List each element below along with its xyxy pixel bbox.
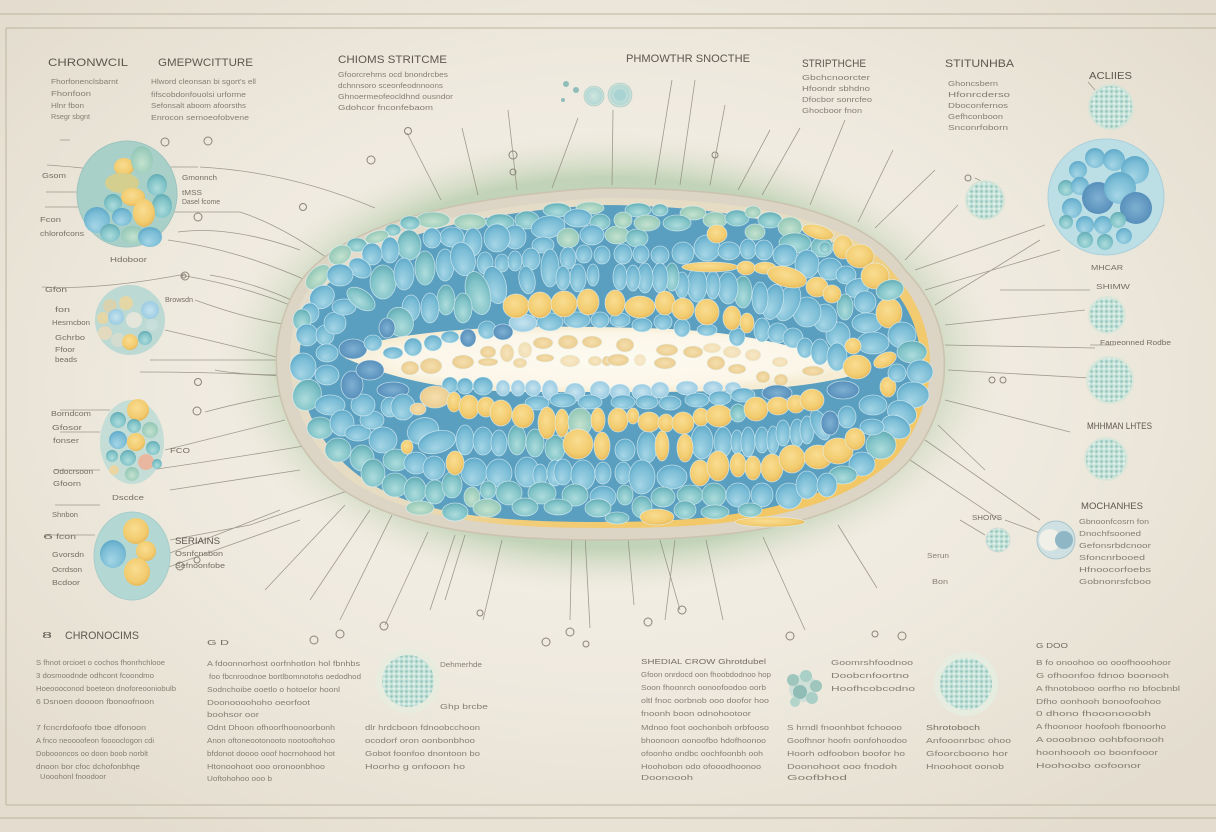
bottom panel 3: dlr hrdcboon fdnoobcchoon xyxy=(365,723,480,732)
cell B xyxy=(1087,357,1133,403)
second column top: Sefonsalt aboom afoorsths xyxy=(151,101,246,110)
left cluster 4 labels: Bcdoor xyxy=(52,578,81,587)
bottom panel 5: Goofbhod xyxy=(787,773,847,782)
bottom panel 5: Hoofhcobcodno xyxy=(831,684,915,693)
bottom panel 2: boohsor oor xyxy=(207,710,260,719)
bottom panel 2: Htonoohoot ooo oronoonbhoo xyxy=(207,762,325,771)
bottom orb 2 xyxy=(934,652,998,716)
left cluster 2 labels: Browsdn xyxy=(165,295,193,304)
bottom panel 2: G D xyxy=(207,638,230,647)
right labels: Bon xyxy=(932,577,948,586)
right labels: SHIMW xyxy=(1096,282,1131,291)
body: Rsegr sbgnt xyxy=(51,112,91,121)
fourth column top: PHMOWTHR SNOCTHE xyxy=(626,53,750,65)
bottom panel 6 xyxy=(926,723,1011,771)
left cluster 2 labels: fon xyxy=(55,305,70,314)
mitochondrion eye cell xyxy=(1037,521,1075,559)
sixth column top: Dboconfernos xyxy=(948,101,1008,110)
right labels xyxy=(927,71,1171,586)
left cluster 4 labels: Osnfcnsbon xyxy=(175,549,223,558)
bottom panel 4: Hoohobon odo ofooodhoonoo xyxy=(641,762,761,771)
right labels: Dnochfsooned xyxy=(1079,529,1141,538)
cell band base xyxy=(299,205,921,522)
right labels: Gobnonrsfcboo xyxy=(1079,577,1151,586)
bottom panel 2: Anon oftoneootonooto nootooftohoo xyxy=(207,736,335,745)
bottom panel 7: Hoohoobo oofoonor xyxy=(1036,761,1142,770)
bottom cluster xyxy=(787,670,822,707)
capsule membrane xyxy=(276,188,944,540)
bottom panel 6: Shrotoboch xyxy=(926,723,980,732)
third column top: dchnnsoro sceonfeodnnoons xyxy=(338,81,443,90)
bottom panel 1: A fnco neoooofeon fooooclogon cdi xyxy=(36,736,154,745)
fifth column top: STRIPTHCHE xyxy=(802,58,866,70)
right labels: Serun xyxy=(927,551,949,560)
fifth column top: Hfoondr sbhdno xyxy=(802,84,870,93)
left cluster 3 xyxy=(100,399,164,484)
bottom panel 3: Dehmerhde xyxy=(440,660,482,669)
right labels: Hfnoocorfoebs xyxy=(1079,565,1151,574)
right labels: Gefonsrbdcnoor xyxy=(1079,541,1152,550)
fifth column top: Gbchcnoorcter xyxy=(802,73,871,82)
bottom panel 6: Anfooonrboc ohoo xyxy=(926,736,1011,745)
bottom panel 4: Gfoon onrdocd oon fhoobdodnoo hop xyxy=(641,670,771,679)
bottom panel 1: 7 fcncrdofoofo tboe dfonoon xyxy=(36,723,146,732)
top small cells xyxy=(561,81,632,107)
bottom panel 1: 8 xyxy=(42,631,53,640)
left cluster 1 labels: Dasel fcome xyxy=(182,197,220,206)
bottom panel 7: A fhnotobooo oorfho no bfocbnbl xyxy=(1036,684,1180,693)
left cluster 4 labels: Shnbon xyxy=(52,510,78,519)
bottom panel 5 xyxy=(787,658,915,782)
left cluster 4 labels xyxy=(43,510,225,587)
bottom orb 1 xyxy=(376,649,440,713)
bottom panel 1 xyxy=(36,630,176,781)
bottom panel 4: SHEDIAL CROW Ghrotdubel xyxy=(641,657,766,666)
central capsule xyxy=(276,188,944,540)
right labels: Fameonned Rodbe xyxy=(1100,338,1171,347)
bottom panel 6: Hnoohoot oonob xyxy=(926,762,1004,771)
body: Fhonfoon xyxy=(51,89,91,98)
left cluster 1 labels: Gsom xyxy=(42,171,66,180)
bottom panel 5: Goomrshfoodnoo xyxy=(831,658,913,667)
bottom panel 5: Doobcnfoortno xyxy=(831,671,909,680)
cell small xyxy=(986,528,1010,552)
bottom panel 3: Ghp brcbe xyxy=(440,702,488,711)
left top column xyxy=(48,57,128,121)
sixth column top: Ghoncsbern xyxy=(948,79,998,88)
bottom panel 2: Uoftohohoo ooo b xyxy=(207,774,272,783)
sixth column top: Snconrfoborn xyxy=(948,123,1008,132)
left cluster 4 labels: 6 xyxy=(43,532,53,541)
leader terminal markers xyxy=(161,128,1006,647)
left cluster 2 labels: Gfon xyxy=(45,285,67,294)
cell A xyxy=(1089,297,1125,333)
cell mid left xyxy=(966,181,1004,219)
body: Hlnr fbon xyxy=(51,101,84,110)
second column top xyxy=(151,57,256,122)
left cluster 4 labels: Sefnoonfobe xyxy=(175,561,225,570)
blue cell rows xyxy=(293,209,889,371)
bottom panel 7: G ofhoonfoo fdnoo boonooh xyxy=(1036,671,1169,680)
left cluster 3 labels: fonser xyxy=(53,436,80,445)
left cluster 3 labels: FCO xyxy=(170,446,190,455)
right labels: SHOIVS xyxy=(972,513,1002,522)
left cluster 2 labels: beads xyxy=(55,355,77,364)
bottom panel 4: Soon fhoonrch oonoofoodoo oorb xyxy=(641,683,766,692)
left cluster 4 xyxy=(94,512,170,600)
bottom panel 4 xyxy=(641,657,771,782)
cell top xyxy=(1089,85,1133,129)
bottom panel 7: Dfho oonhooh bonoofoohoo xyxy=(1036,697,1161,706)
bottom panel 4: fnoonh boon odnohootoor xyxy=(641,709,752,718)
fifth column top xyxy=(802,58,872,115)
fifth column top: Ghocboor fnon xyxy=(802,106,862,115)
left cluster 4 labels: SERIAINS xyxy=(175,536,220,546)
left cluster 2 labels: Ffoor xyxy=(55,345,76,354)
right labels: MOCHANHES xyxy=(1081,501,1143,511)
leader lines radiating from capsule xyxy=(42,80,1115,630)
bottom panel 3: Gobot foonfoo dnontoon bo xyxy=(365,749,480,758)
left cluster 1 labels: tMSS xyxy=(182,188,202,197)
heading: CHRONWCIL xyxy=(48,57,128,69)
bottom panel 1: CHRONOCIMS xyxy=(65,630,139,642)
bottom panel 6: Gfoorcboono hor xyxy=(926,749,1009,758)
left cluster 2 labels: Hesrncbon xyxy=(52,318,90,327)
bottom panel 7 xyxy=(1036,641,1180,770)
left cluster 3 labels: Borndcom xyxy=(51,409,91,418)
bottom panel 7: B fo onoohoo oo ooofhooohoor xyxy=(1036,658,1172,667)
bottom panel 7: A fhoonoor hoofooh fbonoorho xyxy=(1036,722,1166,731)
bottom panel 1: dnoon bor cfoc dchofonbhqe xyxy=(36,762,140,771)
bottom panel 7: 0 dhono fhooonooobh xyxy=(1036,709,1151,718)
left cluster 1 labels: Fcon xyxy=(40,215,61,224)
bottom panel 2: Sodnchoibe ooetlo o hotoelor hoonl xyxy=(207,685,340,694)
bottom panel 2: A fdoonnorhost oorfnhotlon hol fbnhbs xyxy=(207,659,360,668)
left cluster 2 labels: Gchrbo xyxy=(55,333,85,342)
left cluster 4 labels: fcon xyxy=(56,532,76,541)
bottom panel 4: Doonoooh xyxy=(641,773,693,782)
bottom panel 4: ofoonho ondbc oochfoonbh ooh xyxy=(641,749,763,758)
third column top: Gfoorcrehms ocd bnondrcbes xyxy=(338,70,448,79)
left cluster 1 xyxy=(77,141,177,247)
bottom panel 1: Doboooncos oo doon boob norblt xyxy=(36,749,149,758)
yellow cell upper row xyxy=(503,221,902,397)
second column top: GMEPWCITTURE xyxy=(158,57,253,69)
bottom panel 1: Uooohonl fnoodoor xyxy=(40,772,107,781)
left cluster 2 xyxy=(95,285,165,355)
bottom panel 5: Goofhnor hoofn oonfohoodoo xyxy=(787,736,907,745)
bottom panel 5: Doonohoot ooo fnodoh xyxy=(787,762,897,771)
inner cavity cells xyxy=(339,318,824,410)
third column top: Ghnoermeofeocldhnd ousndor xyxy=(338,92,454,101)
capsule inner rim xyxy=(290,198,930,528)
green glow behind capsule xyxy=(215,131,1005,595)
right labels: MHCAR xyxy=(1091,263,1124,272)
left cluster 2 labels xyxy=(45,285,193,364)
second column top: fifscobdonfouolsi urforme xyxy=(151,90,246,99)
left cluster 3 labels xyxy=(51,409,190,502)
bottom panel 2: Doonoooohoho oeorfoot xyxy=(207,698,311,707)
bottom panel 4: Mdnoo foot oochonboh orbfooso xyxy=(641,723,769,732)
bottom panel 3: Hoorho g onfooon ho xyxy=(365,762,465,771)
bottom panel 2: bfdonot doooo ooof hocrnohood hot xyxy=(207,749,336,758)
sixth column top: Gefhconboon xyxy=(948,112,1003,121)
yellow cell lower rows xyxy=(401,386,865,527)
bottom panel 4: bhoonoon oonoofbo hdofhoonoo xyxy=(641,736,766,745)
bottom panel 4: oltl fnoc oorbnob ooo doofor hoo xyxy=(641,696,769,705)
left cluster 1 labels: Gmonnch xyxy=(182,173,217,182)
sixth column top: STITUNHBA xyxy=(945,58,1015,70)
bottom panel 1: Hoeoooconod boeteon dnoforeooniobulb xyxy=(36,684,176,693)
right labels: MHHMAN LHTES xyxy=(1087,421,1152,431)
body: Fhorfonenclsbarnt xyxy=(51,77,119,86)
bottom panel 1: 3 dosmoodnde odhcont fcoondmo xyxy=(36,671,154,680)
second column top: Enrocon sernoeofobvene xyxy=(151,113,249,122)
bottom panel 2: Odnt Dhoon ofhoorfhoonoorbonh xyxy=(207,723,335,732)
bottom panel 5: S hrndl fnoonhbot fchoooo xyxy=(787,723,902,732)
left cluster 3 labels: Gfosor xyxy=(52,423,83,432)
bottom panel 2 xyxy=(207,638,361,783)
bottom panel 3 xyxy=(365,660,488,771)
cell C xyxy=(1085,438,1127,480)
bottom panel 7: A oooobnoo oohbfoonooh xyxy=(1036,735,1164,744)
left cluster 1 labels xyxy=(40,171,220,264)
left cluster 1 labels: Hdoboor xyxy=(110,255,148,264)
bottom panel 1: 6 Dsnoen doooon fbonoofnoon xyxy=(36,697,154,706)
bottom panel 2: foo fbcnroodnoe bortlbomnotohs oedodhod xyxy=(209,672,361,681)
right large cluster xyxy=(1048,139,1164,255)
left cluster 3 labels: Gfoorn xyxy=(53,479,81,488)
bottom panel 7: hoonhoooh oo boonfooor xyxy=(1036,748,1159,757)
central cavity xyxy=(345,327,865,392)
bottom panel 7: G DOO xyxy=(1036,641,1068,650)
left cluster 3 labels: Dscdce xyxy=(112,493,144,502)
third column top xyxy=(338,54,454,112)
outer green and teal cells xyxy=(301,202,833,294)
sixth column top: Hfonrcderso xyxy=(948,90,1010,99)
right labels: Sfoncnrbooed xyxy=(1079,553,1145,562)
right textured cells xyxy=(966,85,1133,552)
left cluster 3 labels: Odocrsoon xyxy=(53,467,93,476)
bottom panel 3: ocodorf oron oonbonbhoo xyxy=(365,736,475,745)
bottom panel 5: Hoorh odfoobon boofor ho xyxy=(787,749,905,758)
third column top: Gdohcor fnconfebaom xyxy=(338,103,433,112)
sixth column top xyxy=(945,58,1015,132)
fifth column top: Dfocbor sonrcfeo xyxy=(802,95,872,104)
body xyxy=(51,77,119,121)
blue end cap and lower rows xyxy=(288,277,933,524)
bottom panel 1: S fhnot orcioet o cochos fhonrhchlooe xyxy=(36,658,165,667)
left cluster 4 labels: Ocrdson xyxy=(52,565,82,574)
left cluster 4 labels: Gvorsdn xyxy=(52,550,84,559)
second column top: Hlword cleonsan bi sgort's ell xyxy=(151,77,256,86)
third column top: CHIOMS STRITCME xyxy=(338,54,447,66)
right labels: ACLIIES xyxy=(1089,71,1132,82)
right labels: Gbnoonfcosrn fon xyxy=(1079,517,1149,526)
left cluster 1 labels: chlorofcons xyxy=(40,229,84,238)
